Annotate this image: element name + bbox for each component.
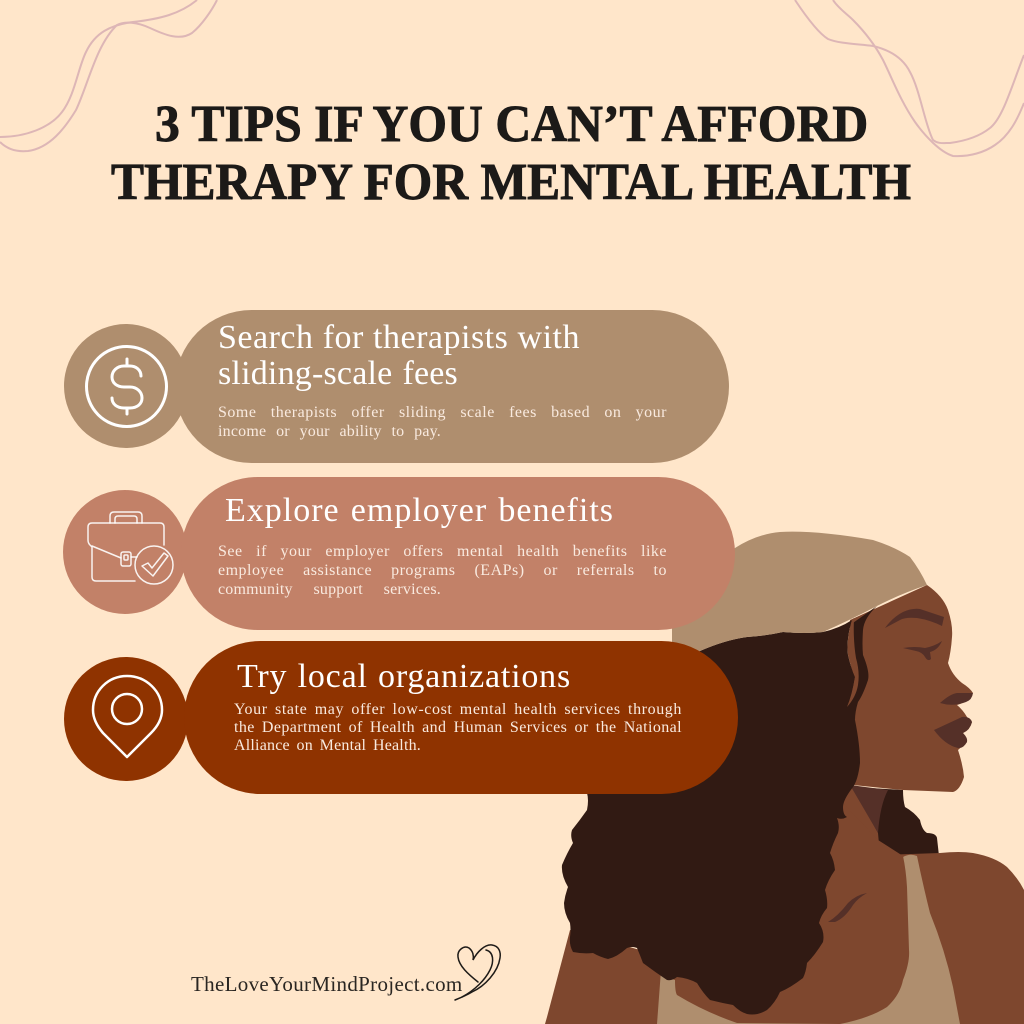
body text: Alliance on Mental Health. bbox=[234, 737, 421, 754]
body text: Some therapists offer sliding scale fees based on your bbox=[218, 404, 667, 421]
body text: Your state may offer low-cost mental health services through bbox=[234, 701, 682, 718]
heading second line: sliding-scale fees bbox=[218, 355, 458, 392]
body text bbox=[234, 701, 682, 754]
heading: Try local organizations bbox=[237, 658, 571, 695]
heading: Explore employer benefits bbox=[225, 492, 614, 529]
icon: briefcase with check bbox=[63, 490, 187, 614]
title bbox=[111, 96, 911, 211]
panel: sliding-scale fees bbox=[64, 310, 729, 463]
pill background bbox=[175, 310, 729, 463]
body text bbox=[218, 404, 667, 440]
title: THERAPY FOR MENTAL HEALTH bbox=[111, 154, 911, 211]
icon: dollar circle bbox=[64, 324, 188, 448]
pill background bbox=[184, 641, 738, 794]
body text: the Department of Health and Human Services or the National bbox=[234, 719, 682, 736]
body text: employee assistance programs (EAPs) or referrals to bbox=[218, 562, 667, 579]
pill background bbox=[181, 477, 735, 630]
heading: Search for therapists with bbox=[218, 319, 580, 356]
website text: TheLoveYourMindProject.com bbox=[191, 972, 463, 996]
body text bbox=[218, 543, 667, 598]
panel: local organizations bbox=[64, 641, 738, 794]
title: 3 TIPS IF YOU CAN’T AFFORD bbox=[155, 96, 868, 153]
logo: The Love Your Mind Project bbox=[191, 944, 501, 1001]
body text: community support services. bbox=[218, 581, 441, 598]
icon: map pin bbox=[64, 657, 188, 781]
panel: employer benefits bbox=[63, 477, 735, 630]
body text: See if your employer offers mental health benefits like bbox=[218, 543, 667, 560]
body text: income or your ability to pay. bbox=[218, 423, 441, 440]
icon: heart bbox=[454, 944, 501, 1001]
